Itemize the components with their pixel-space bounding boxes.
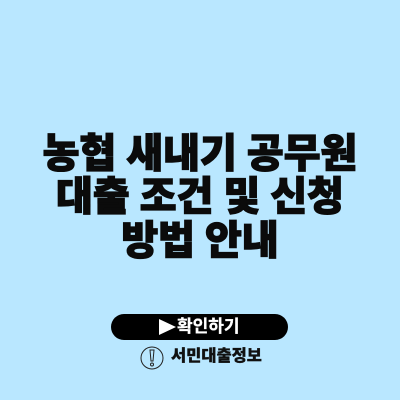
brand name: 서민대출정보 — [171, 348, 262, 365]
title: 방법 안내 — [121, 219, 279, 263]
button: 확인하기 — [111, 314, 288, 340]
title — [43, 132, 357, 263]
title: 농협 새내기 공무원 — [43, 132, 357, 176]
brand: 서민대출정보 — [140, 346, 262, 370]
title: 대출 조건 및 신청 — [56, 175, 344, 219]
button label: 확인하기 — [177, 317, 240, 336]
icon: exclamation circle — [140, 346, 164, 370]
icon: play triangle — [159, 319, 176, 335]
